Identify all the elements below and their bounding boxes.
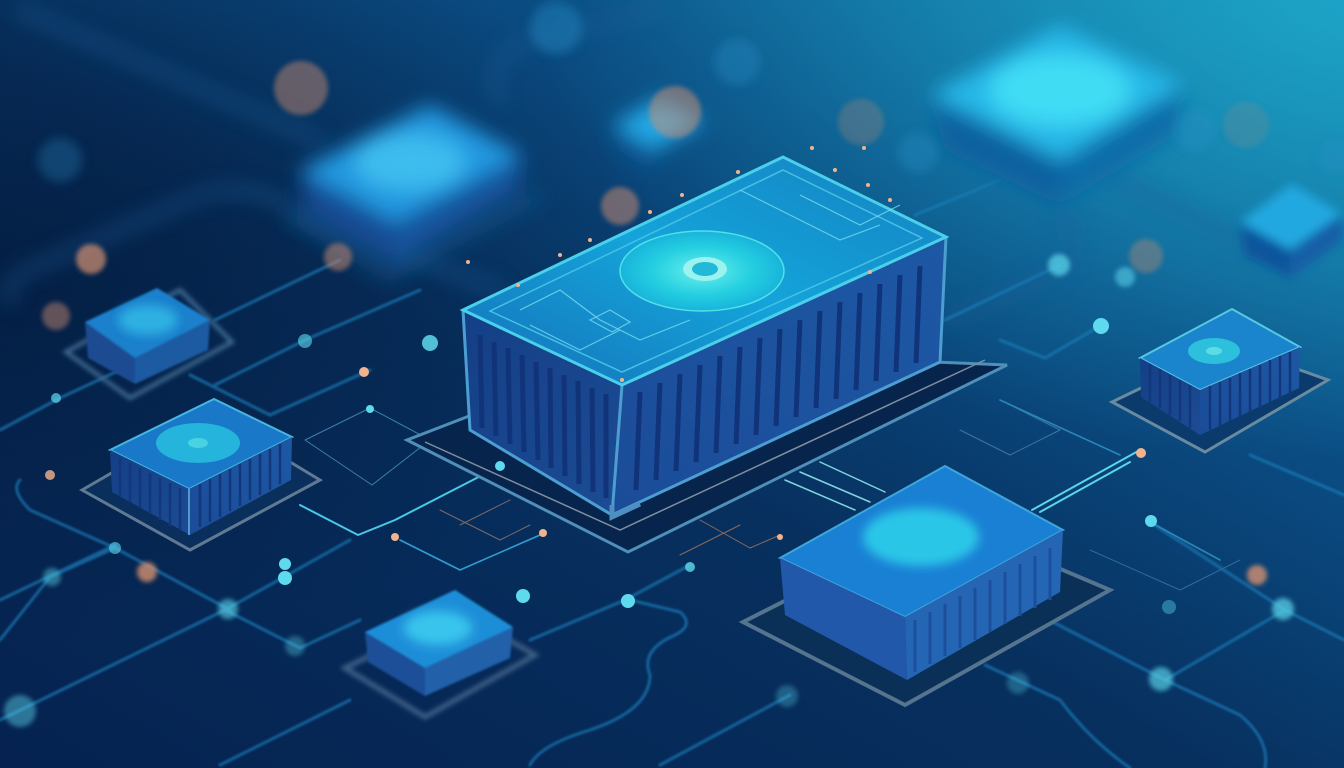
- container edge highlights: [463, 237, 946, 515]
- module: right small with disc: [1112, 309, 1328, 452]
- module: left with disc: [82, 399, 320, 550]
- container top face: [463, 157, 946, 385]
- module: far right blurred: [1240, 184, 1344, 278]
- container right face: [612, 237, 946, 515]
- module: upper left small: [66, 288, 232, 398]
- central container: [463, 157, 946, 517]
- corrugation ribs: [480, 266, 920, 498]
- sharp circuit lines: [300, 400, 1240, 590]
- disc: [620, 231, 784, 311]
- orange sparks: [45, 146, 1146, 541]
- module: bottom right large: [743, 466, 1110, 705]
- blurred background modules: [290, 25, 1344, 278]
- platform under central container: [407, 350, 1007, 552]
- module: small blurred top: [612, 98, 705, 172]
- blurred blue bokeh: [38, 2, 1344, 182]
- module: bottom small: [345, 590, 535, 717]
- module: top right blurred: [930, 25, 1185, 205]
- container left face: [463, 310, 622, 515]
- cyan nodes: [4, 254, 1294, 727]
- blurred orange bokeh: [42, 61, 1269, 585]
- top circuit etching: [520, 190, 900, 350]
- module: top centre blurred: [290, 105, 540, 275]
